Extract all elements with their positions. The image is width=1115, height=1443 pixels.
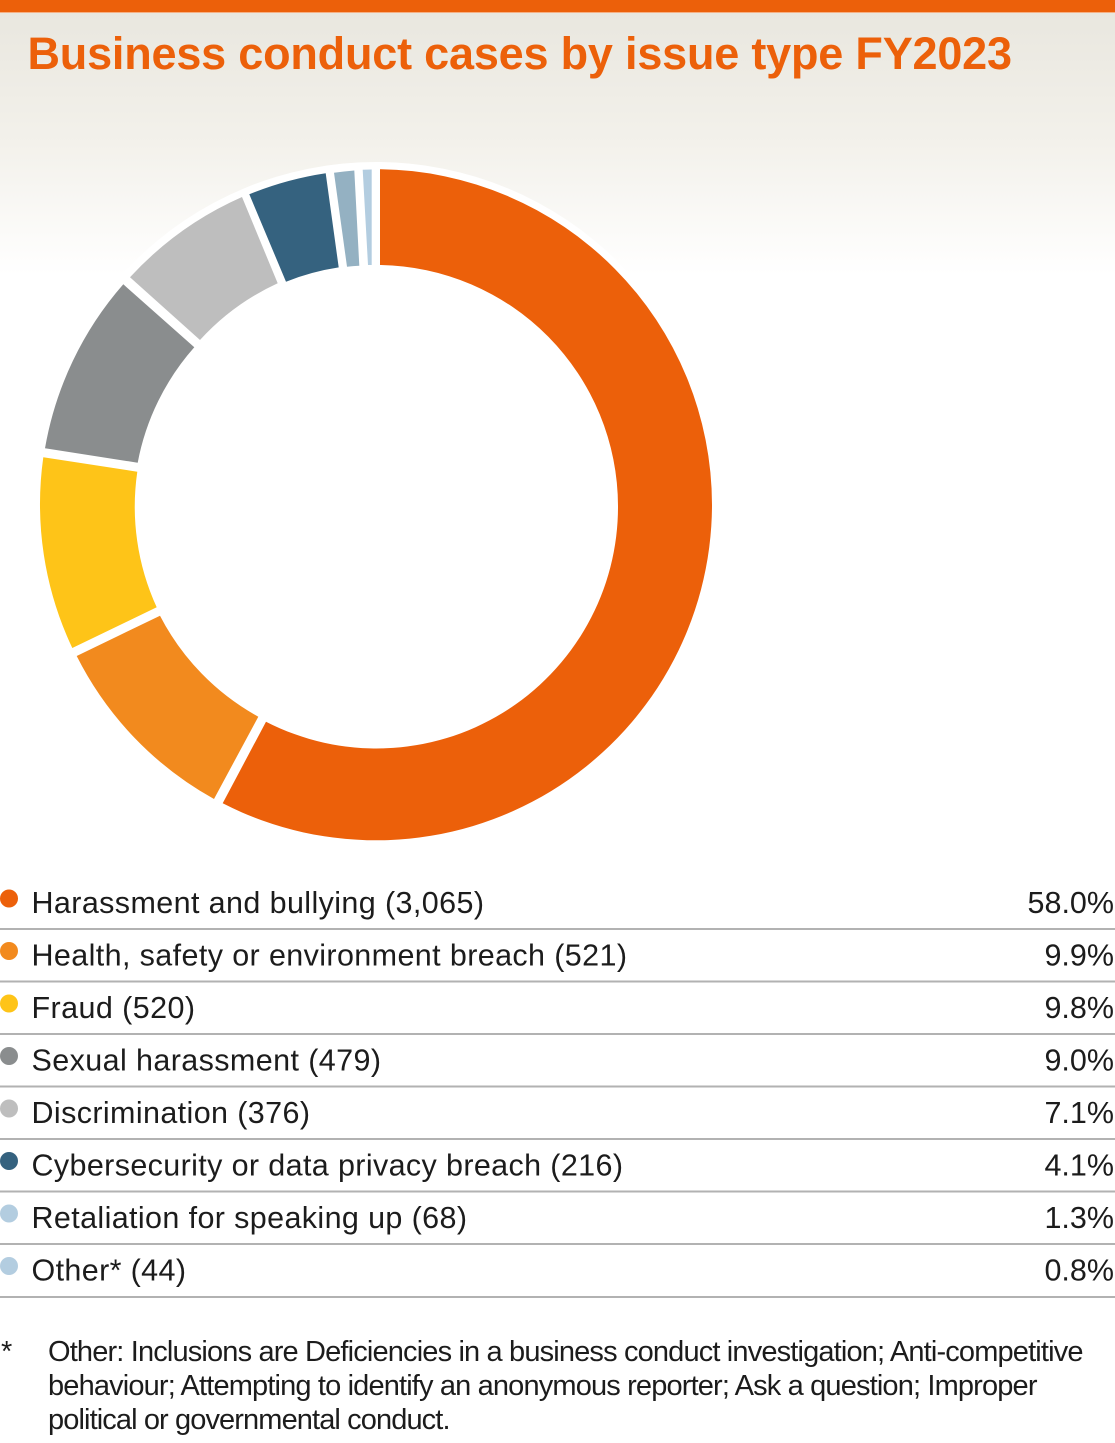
row: retaliation for speaking up	[0, 1201, 1115, 1244]
segment: harassment and bullying 58.0%	[223, 169, 712, 840]
row: sexual harassment: 9.0%	[1044, 1044, 1114, 1078]
footnote: political or governmental conduct.	[48, 1404, 450, 1436]
row: cybersecurity or data privacy breach: Cybersecurity or data privacy breach (216)	[32, 1148, 623, 1182]
segment: sexual harassment 9.0%	[45, 284, 194, 463]
row: harassment and bullying	[0, 886, 1115, 929]
row: health, safety or environment breach	[0, 938, 1115, 982]
legend table	[0, 886, 1115, 1297]
top orange bar	[0, 0, 1115, 12]
footnote: Other: Inclusions are Deficiencies in a business conduct investigation; Anti-competitive	[48, 1336, 1084, 1368]
row: cybersecurity or data privacy breach	[0, 1148, 1115, 1192]
footnote: behaviour; Attempting to identify an anonymous reporter; Ask a question; Improper	[48, 1370, 1038, 1402]
title: Business conduct cases by issue type FY2023	[28, 28, 1012, 79]
row: discrimination: Discrimination (376)	[32, 1096, 310, 1130]
row: harassment and bullying: 58.0%	[1028, 886, 1114, 920]
row: fraud: 9.8%	[1044, 991, 1114, 1025]
row: sexual harassment: Sexual harassment (479)	[32, 1044, 381, 1078]
row: health, safety or environment breach: 9.9%	[1044, 938, 1114, 972]
header gradient background	[0, 13, 1115, 275]
row: health, safety or environment breach: Health, safety or environment breach (521)	[32, 938, 627, 972]
segment: retaliation for speaking up 1.3%	[334, 170, 359, 267]
row: other	[0, 1254, 1115, 1297]
footnote: *	[1, 1336, 12, 1368]
row: cybersecurity or data privacy breach: 4.1%	[1044, 1148, 1114, 1182]
segment: cybersecurity or data privacy breach 4.1%	[249, 173, 339, 282]
segment: discrimination 7.1%	[130, 197, 278, 340]
row: retaliation for speaking up: Retaliation for speaking up (68)	[32, 1201, 467, 1235]
segment: other 0.8%	[363, 170, 372, 265]
row: discrimination	[0, 1096, 1115, 1139]
row: other: 0.8%	[1044, 1254, 1114, 1288]
row: discrimination: 7.1%	[1044, 1096, 1114, 1130]
row: retaliation for speaking up: 1.3%	[1044, 1201, 1114, 1235]
footnote	[1, 1336, 1084, 1436]
donut chart	[33, 162, 719, 848]
segment: health, safety or environment breach 9.9%	[77, 616, 258, 799]
row: sexual harassment	[0, 1044, 1115, 1086]
row: fraud: Fraud (520)	[32, 991, 195, 1025]
row: other: Other* (44)	[32, 1254, 186, 1288]
row: harassment and bullying: Harassment and bullying (3,065)	[32, 886, 484, 920]
segment: fraud 9.8%	[40, 457, 157, 648]
row: fraud	[0, 991, 1115, 1034]
